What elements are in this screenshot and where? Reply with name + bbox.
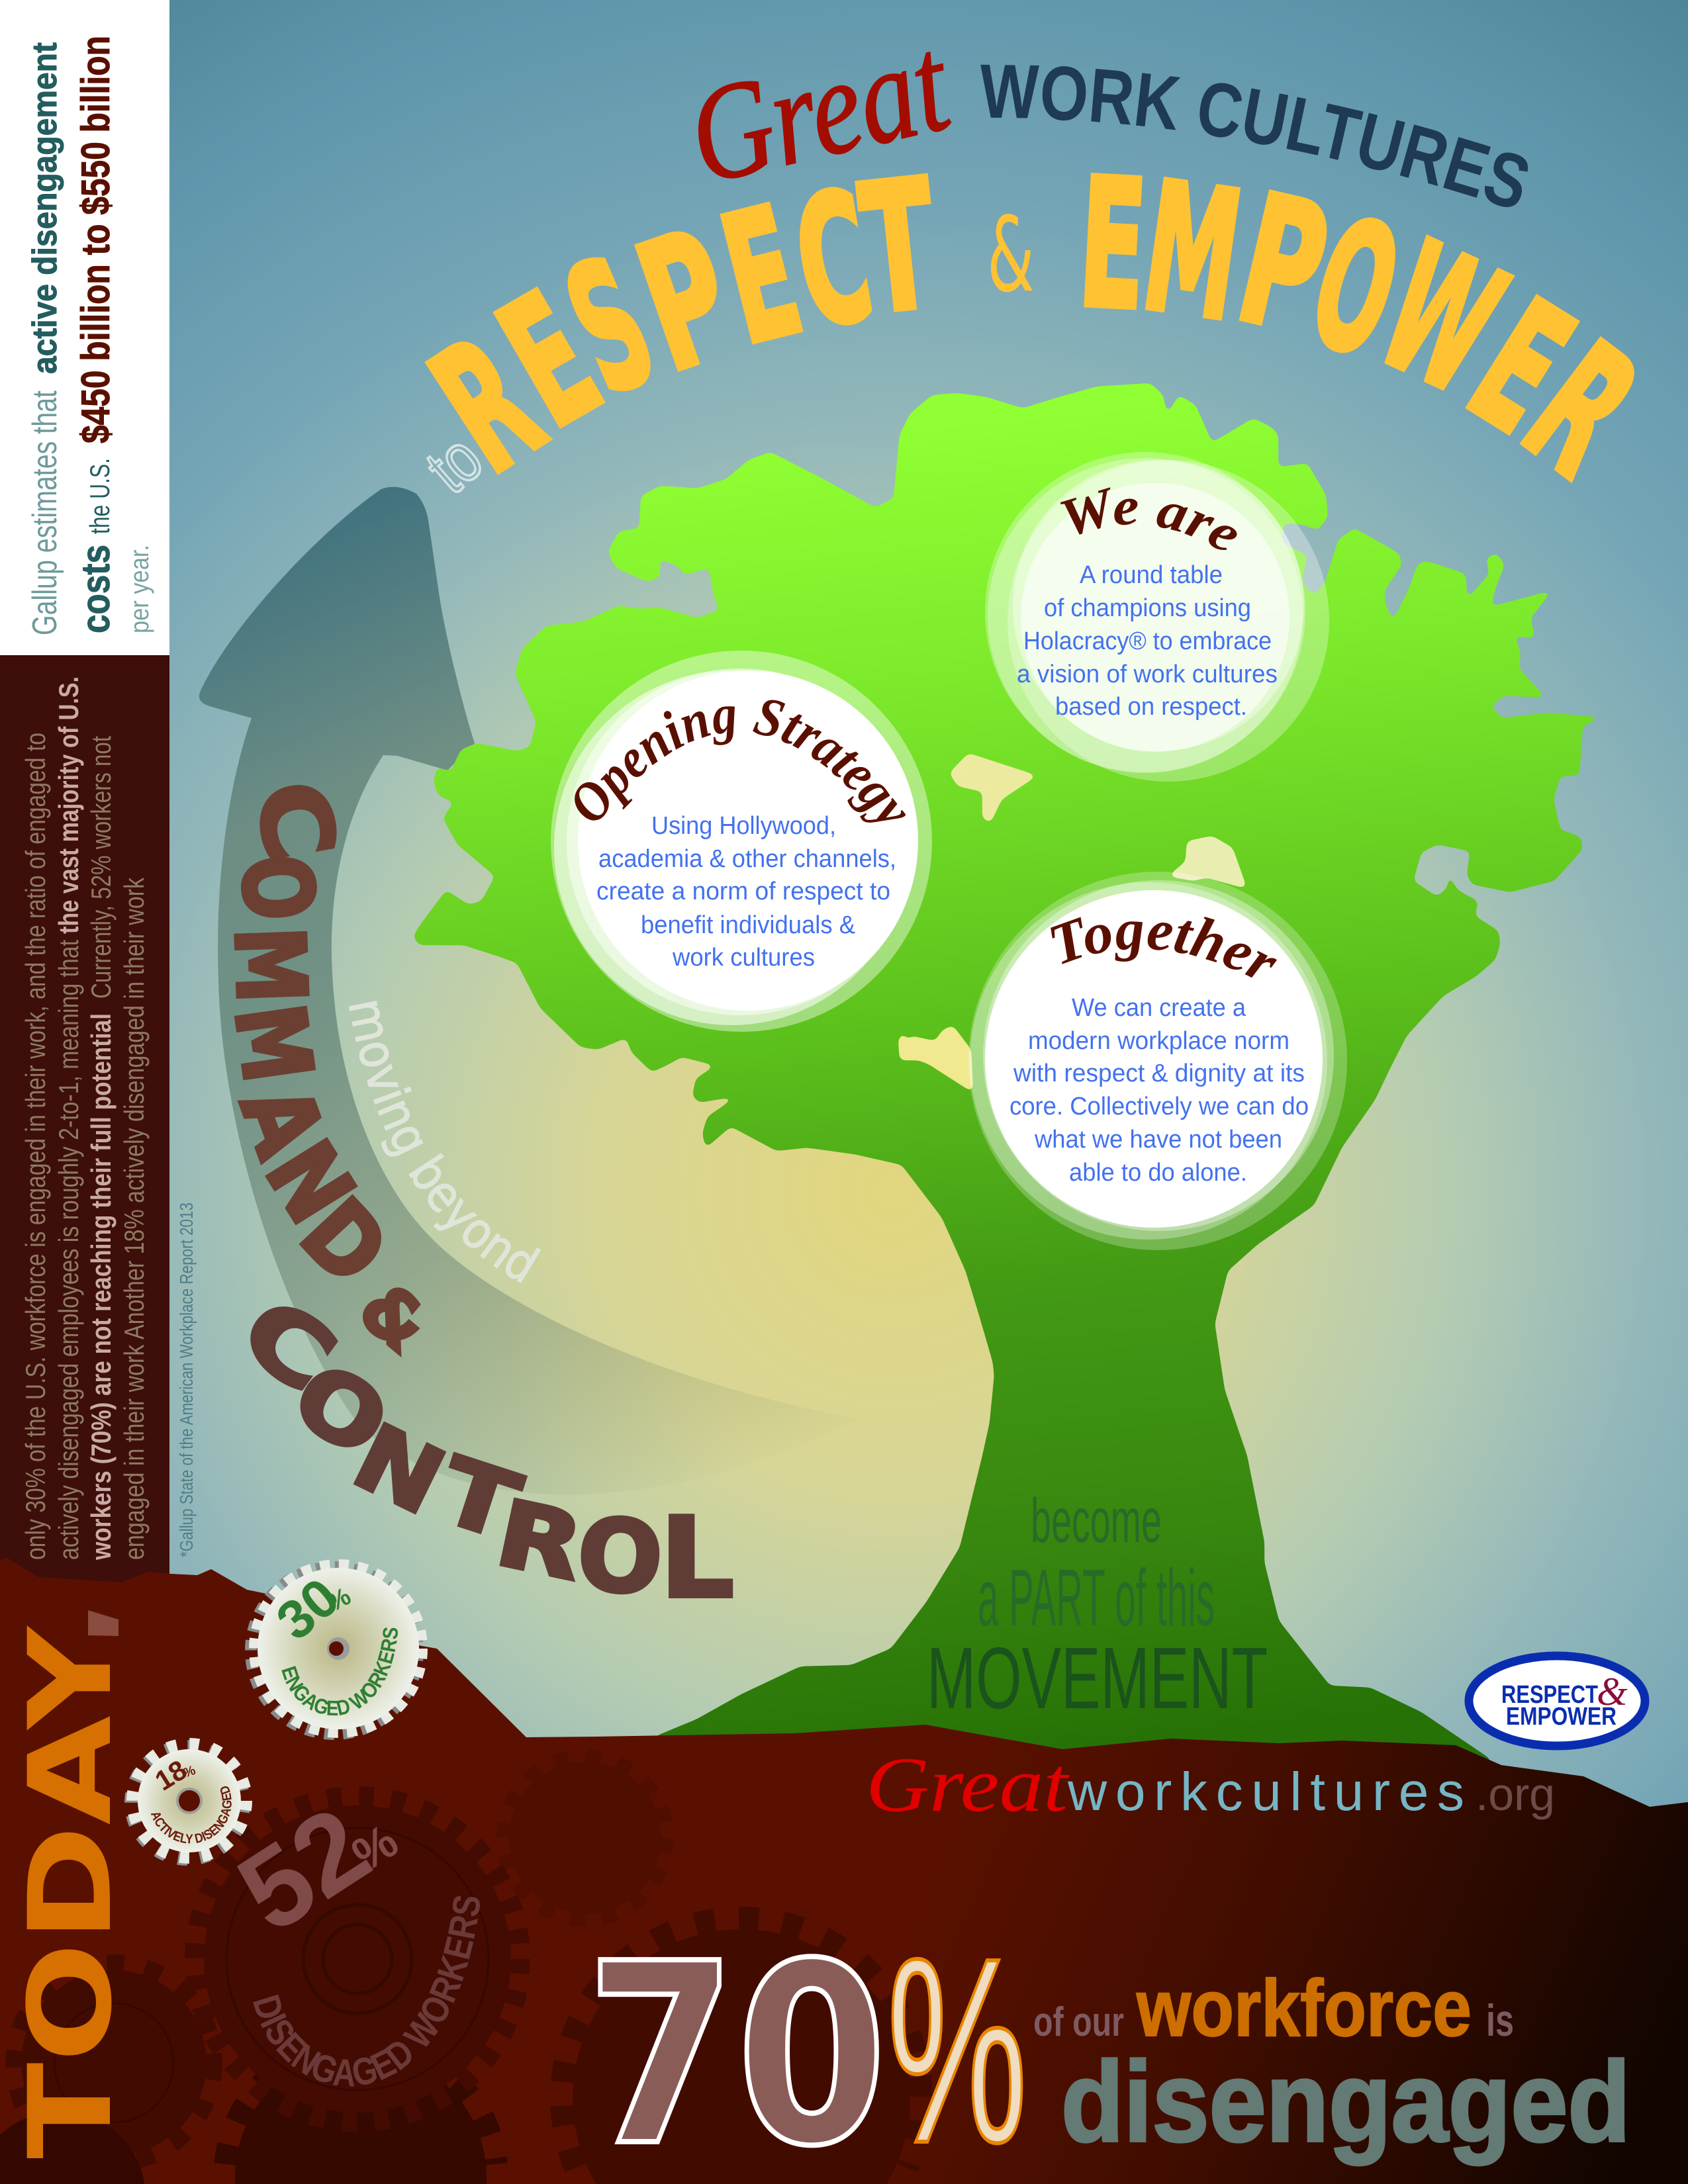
text: of our workforce is disengaged: disengaged (1061, 2038, 1630, 2165)
logo: Respect & Empower (1469, 1656, 1645, 1746)
text: Together body: with respect & dignity at its (1013, 1060, 1305, 1087)
heading: Opening Strategy: Opening Strategy (575, 700, 906, 823)
text: Together body: We can create a (1072, 994, 1246, 1022)
title: RESPECT & EMPOWER: W (1352, 205, 1530, 433)
title: RESPECT & EMPOWER: & (987, 195, 1035, 316)
title: RESPECT & EMPOWER: E (1074, 140, 1150, 349)
text: We are body (1017, 561, 1278, 721)
website: greatworkcultures.org (866, 1741, 1555, 1828)
text: per year: per year. (125, 545, 154, 633)
label: COMMAND & CONTROL: O (276, 1342, 406, 1478)
text: Together body: modern workplace norm (1028, 1027, 1289, 1055)
call to action: become a part of this movement (927, 1486, 1268, 1727)
text: We are body: a vision of work cultures (1017, 660, 1278, 688)
panel: white stat (0, 0, 169, 655)
tree gaps (898, 753, 1247, 1093)
tree (413, 383, 1603, 1800)
title: RESPECT & EMPOWER: C (782, 154, 884, 368)
title: WORK CULTURES: WORK CULTURES (980, 65, 1528, 207)
label: COMMAND & CONTROL: L (660, 1494, 734, 1623)
gear: 52% disengaged workers (185, 1783, 530, 2132)
title: RESPECT & EMPOWER: R (402, 300, 574, 512)
text: Together body (1009, 994, 1309, 1187)
title: RESPECT & EMPOWER: M (1133, 144, 1252, 361)
text: line 1: only 30% of the U.S. workforce is engaged in their work, and the ratio of engaged to (20, 733, 51, 1560)
title: to: to (412, 420, 496, 508)
text: Gallup estimates: Gallup estimates that (26, 390, 64, 635)
ground (0, 1558, 1688, 2184)
text: We are body: of champions using (1044, 594, 1251, 622)
label: COMMAND & CONTROL: M (213, 925, 327, 1005)
website: greatworkcultures.org: workcultures (1067, 1762, 1464, 1822)
panel: We are (985, 452, 1329, 782)
text: currently: Currently, 52% workers not (85, 736, 117, 999)
website: greatworkcultures.org: .org (1476, 1768, 1555, 1820)
gear: 18% actively disengaged (124, 1738, 252, 1866)
text: disengaged workers: DISENGAGED WORKERS (253, 1895, 480, 2087)
title: RESPECT & EMPOWER: P (1223, 156, 1344, 374)
title: RESPECT & EMPOWER: T (853, 142, 945, 353)
text: percent: % (181, 1763, 198, 1781)
logo: Respect & Empower: RESPECT (1501, 1681, 1598, 1709)
title: RESPECT & EMPOWER: E (471, 255, 630, 466)
heading: Together: Together (1051, 917, 1277, 978)
text: percent: % (343, 1814, 407, 1882)
text: We are body: based on respect. (1055, 693, 1247, 721)
label: COMMAND & CONTROL: & (344, 1267, 443, 1368)
logo: Respect & Empower: EMPOWER (1506, 1703, 1617, 1731)
label: COMMAND & CONTROL: A (218, 1071, 346, 1171)
text: We are body: Holacracy® to embrace (1023, 627, 1272, 655)
arrow: curved upward (199, 487, 861, 1494)
call to action: become a part of this movement: MOVEMENT (927, 1629, 1268, 1727)
label: COMMAND & CONTROL: N (244, 1123, 375, 1242)
title: RESPECT & EMPOWER: P (616, 192, 757, 411)
gear: 30% engaged workers (245, 1559, 428, 1740)
text: 18: 18 (150, 1754, 192, 1797)
text: Together body: able to do alone. (1069, 1159, 1247, 1187)
panel: Together (968, 872, 1347, 1250)
label: COMMAND & CONTROL: C (234, 773, 357, 868)
title: Great: Great (676, 7, 964, 213)
panel: dark statistics (0, 655, 169, 1595)
title: RESPECT & EMPOWER: E (1438, 263, 1603, 472)
label: COMMAND & CONTROL (213, 773, 734, 1623)
text: of our workforce is disengaged (1033, 1963, 1630, 2165)
text: Opening Strategy body: Using Hollywood, (651, 812, 836, 840)
text: 30: 30 (265, 1567, 350, 1652)
text: Opening Strategy body (596, 812, 896, 972)
call to action: become a part of this movement: a PART of this (978, 1553, 1215, 1643)
title: RESPECT & EMPOWER: E (705, 169, 818, 385)
title: RESPECT & EMPOWER (402, 140, 1671, 514)
title: RESPECT & EMPOWER: O (1291, 181, 1420, 398)
heading: TODAY: TODAY (4, 1625, 137, 2159)
text: engaged workers: ENGAGED WORKERS (281, 1627, 398, 1715)
text: of our workforce is disengaged: workforce (1136, 1963, 1472, 2053)
panel: Opening Strategy (551, 651, 932, 1032)
label: COMMAND & CONTROL: R (488, 1480, 592, 1601)
text: line 2: actively disengaged employees is roughly 2-to-1, meaning that (53, 940, 84, 1560)
label: COMMAND & CONTROL: D (279, 1179, 409, 1306)
title: RESPECT & EMPOWER: S (541, 220, 679, 434)
text: vast majority: the vast majority of U.S. (53, 676, 84, 934)
text: active disengagement: active disengagement (26, 42, 64, 374)
call to action: become a part of this movement: become (1031, 1486, 1162, 1556)
label: moving beyond: moving beyond (348, 1001, 541, 1283)
label: COMMAND & CONTROL: M (213, 998, 334, 1089)
text: We are body: A round table (1080, 561, 1223, 589)
label: COMMAND & CONTROL: C (222, 1277, 353, 1413)
footnote: *Gallup State of the American Workplace Report 2013 (176, 1203, 197, 1557)
label: COMMAND & CONTROL: O (219, 850, 336, 925)
label: COMMAND & CONTROL: T (428, 1437, 531, 1561)
label: COMMAND & CONTROL: N (338, 1404, 460, 1535)
logo: Respect & Empower: & (1597, 1670, 1628, 1713)
text: percent: % (323, 1582, 355, 1617)
text: Opening Strategy body: create a norm of respect to (596, 878, 890, 905)
text: Together body: what we have not been (1034, 1126, 1282, 1154)
text: workers not reaching potential: workers (70%) are not reaching their full potential (85, 1013, 117, 1561)
background gears (0, 1757, 920, 2184)
text: of our workforce is disengaged: of our (1033, 1999, 1124, 2045)
label: COMMAND & CONTROL: O (574, 1497, 666, 1617)
text: line 4: engaged in their work Another 18% actively disengaged in their work (118, 877, 150, 1560)
text: 52: 52 (217, 1783, 391, 1956)
text: Opening Strategy body: work cultures (672, 944, 815, 972)
apostrophe (88, 1610, 118, 1636)
text: Together body: core. Collectively we can do (1009, 1093, 1309, 1120)
text: Opening Strategy body: benefit individuals & (641, 911, 855, 939)
text: costs: costs (73, 545, 118, 633)
text: of our workforce is disengaged: is (1486, 1995, 1514, 2046)
heading: We are: We are (1060, 487, 1237, 550)
text: Opening Strategy body: academia & other channels, (598, 845, 896, 873)
text: the U.S.: the U.S. (84, 458, 115, 534)
website: greatworkcultures.org: Great (866, 1741, 1070, 1828)
text: actively disengaged: ACTIVELY DISENGAGED (151, 1786, 232, 1844)
title: RESPECT & EMPOWER: R (1490, 307, 1671, 514)
